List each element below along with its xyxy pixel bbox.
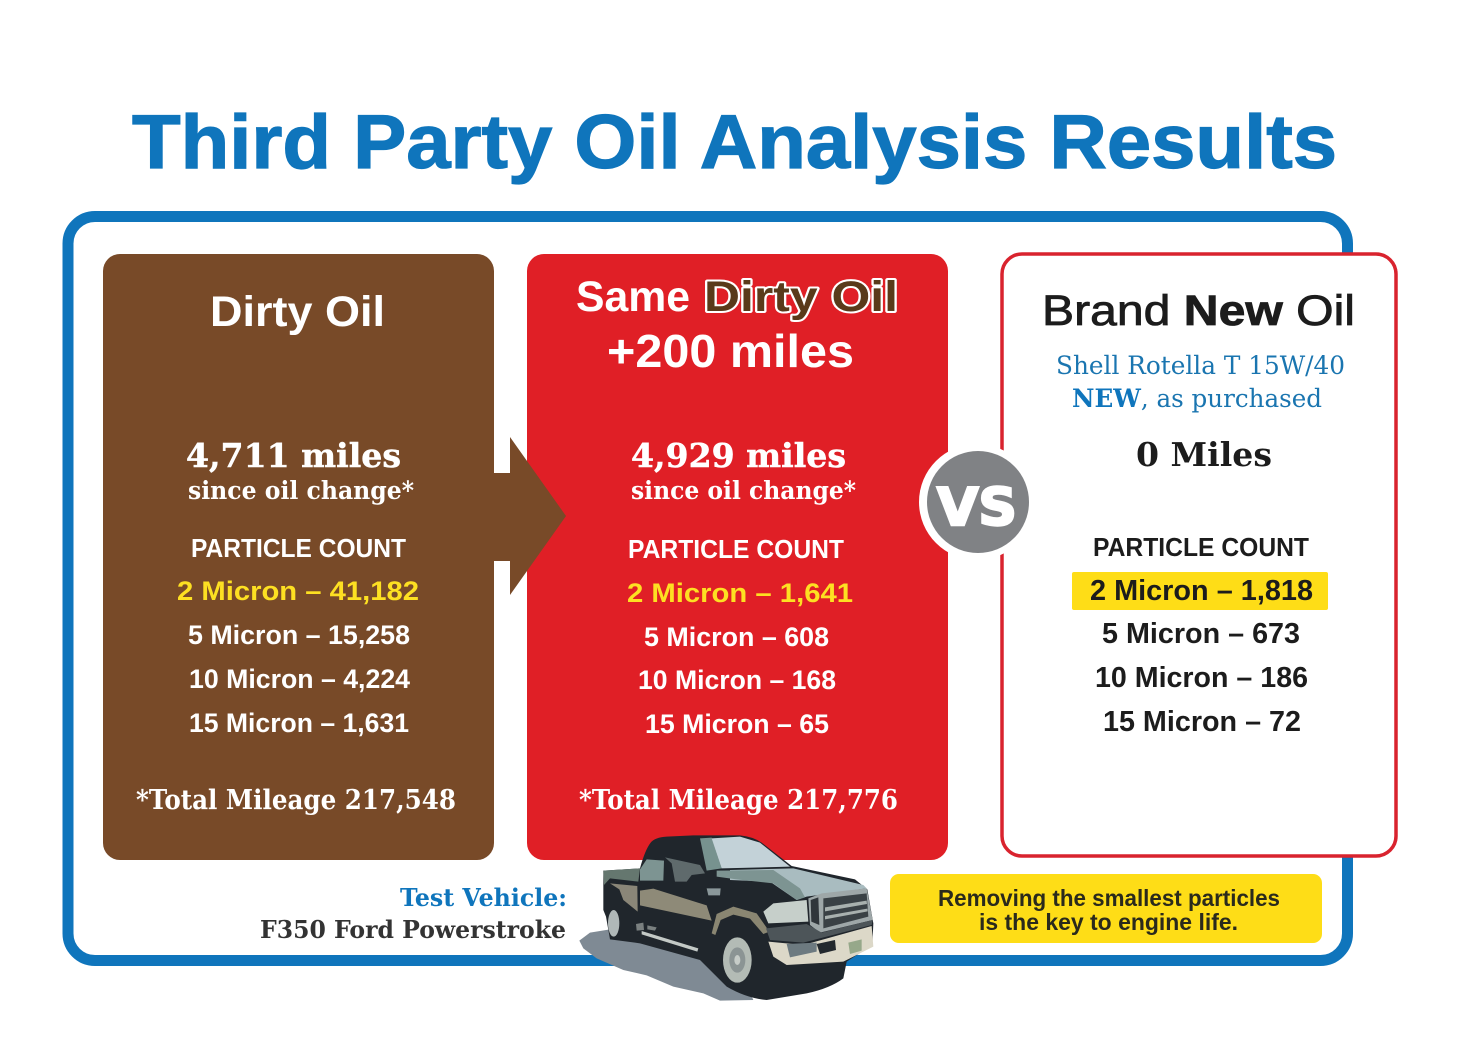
callout (890, 874, 1322, 943)
callout: Removing the smallest particles (938, 885, 1280, 911)
mileage: 0 Miles (1136, 435, 1272, 474)
2 micron: 2 Micron – 1,818 (1090, 575, 1313, 607)
fender trim (712, 907, 769, 935)
product note: NEW, as purchased (1072, 384, 1322, 413)
heading: same dirty oil: Same (576, 273, 690, 321)
5 micron: 5 Micron – 608 (644, 622, 829, 652)
highlight: 2 micron (1072, 572, 1328, 610)
running board (642, 931, 698, 952)
heading: plus 200 miles: +200 miles (607, 325, 854, 377)
5 micron: 5 Micron – 673 (1102, 618, 1300, 650)
blue outer frame (68, 216, 1348, 960)
grille (808, 888, 873, 933)
heading: same dirty oil: Dirty Oil (704, 273, 898, 321)
2 micron: 2 Micron – 1,641 (627, 578, 853, 608)
heading: dirty oil: Dirty Oil (210, 288, 385, 336)
15 micron: 15 Micron – 65 (645, 709, 829, 739)
versus badge (919, 444, 1035, 560)
door reflection (640, 889, 712, 921)
mileage: 4,929 miles (631, 436, 846, 475)
test vehicle label: Test Vehicle: (400, 883, 567, 912)
truck body (603, 835, 873, 1000)
heading: same dirty oil (576, 273, 898, 321)
title: Third Party Oil Analysis Results (132, 100, 1337, 185)
10 micron: 10 Micron – 4,224 (189, 664, 410, 694)
upper bumper band (766, 920, 873, 943)
truck bed rail (603, 868, 640, 885)
15 micron: 15 Micron – 72 (1103, 706, 1301, 738)
panel: dirty oil (103, 254, 494, 860)
windshield (712, 837, 790, 868)
rear cab window (640, 859, 664, 881)
versus badge: VS (937, 478, 1017, 538)
2 micron: 2 Micron – 41,182 (177, 576, 419, 606)
headlight (763, 900, 808, 923)
product name: Shell Rotella T 15W/40 (1056, 351, 1345, 380)
icon: pickup truck (579, 835, 873, 1001)
total mileage: *Total Mileage 217,776 (579, 785, 898, 816)
panel: same dirty oil (527, 254, 948, 860)
bumper (768, 926, 873, 965)
callout: is the key to engine life. (979, 909, 1238, 935)
5 micron: 5 Micron – 15,258 (188, 620, 410, 650)
mileage caption: since oil change* (631, 476, 856, 505)
15 micron: 15 Micron – 1,631 (189, 708, 409, 738)
total mileage: *Total Mileage 217,548 (136, 785, 456, 816)
hood (730, 868, 867, 900)
cab side pillar (700, 838, 722, 871)
panel: brand new oil (1002, 254, 1396, 856)
particle count heading: PARTICLE COUNT (1093, 532, 1309, 562)
front side window (665, 857, 705, 882)
bed side reflection (610, 883, 638, 912)
test vehicle label: F350 Ford Powerstroke (260, 915, 566, 944)
mileage caption: since oil change* (188, 476, 414, 505)
test vehicle label (260, 883, 567, 944)
truck shadow (579, 929, 753, 1001)
heading: brand new oil: Brand New Oil (1042, 287, 1355, 335)
particle count heading: PARTICLE COUNT (628, 534, 844, 564)
particle count heading: PARTICLE COUNT (191, 533, 406, 563)
step details (636, 923, 657, 931)
mileage: 4,711 miles (186, 436, 401, 475)
10 micron: 10 Micron – 168 (638, 665, 836, 695)
front wheel (723, 937, 752, 983)
mirror (707, 888, 721, 895)
arrow (494, 437, 566, 595)
rear wheel (608, 910, 619, 937)
license plate (848, 939, 862, 954)
10 micron: 10 Micron – 186 (1095, 662, 1308, 694)
